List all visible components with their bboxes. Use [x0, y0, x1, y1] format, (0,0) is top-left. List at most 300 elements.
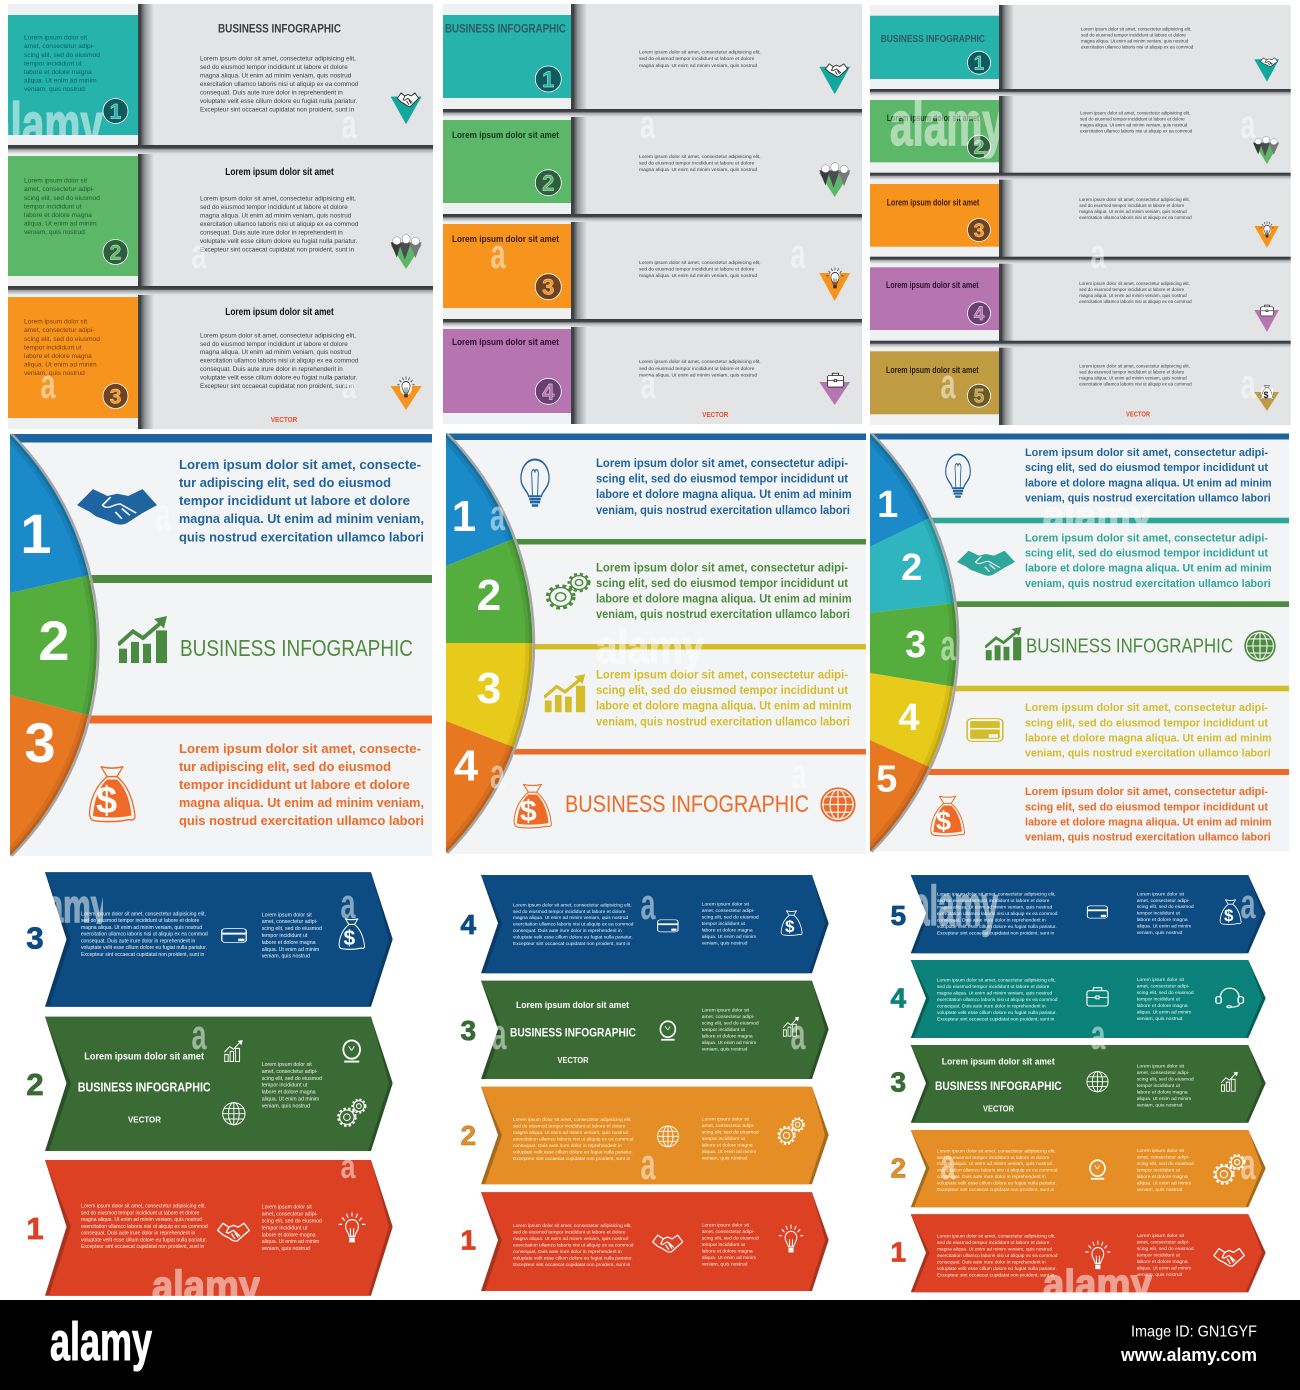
arrow 1 left text: Lorem ipsum dolor sit amet, consectetur adipisicing elit, [513, 1223, 632, 1229]
arrow 4 left text: exercitation ullamco laboris nisi ut aliquip ex ea commod [513, 922, 634, 928]
arrow 1 right text: amet, consectetur adipi- [702, 1229, 755, 1235]
arrow 1 left text: voluptate velit esse cillum dolore eu fugiat nulla pariatur. [513, 1255, 633, 1261]
arrow 4 right text: veniam, quis nostrud [702, 940, 748, 946]
arrow 1 right text: aliqua. Ut enim ad minim [262, 1239, 320, 1245]
arrow 4 left text: Lorem ipsum dolor sit amet, consectetur adipisicing elit, [937, 978, 1056, 984]
body text 1: sed do eiusmod tempor incididunt ut labore et dolore [639, 56, 755, 62]
watermarks: a [640, 1140, 656, 1189]
text block green [596, 562, 852, 621]
text block orange: Lorem ipsum dolor sit amet, consectetur adipi- [1025, 786, 1268, 798]
arrow 1 left text: consequat. Duis aute irure dolor in reprehenderit in [513, 1249, 622, 1255]
arrow 1 right text: Lorem ipsum dolor sit [702, 1222, 750, 1228]
number 3: 3 [891, 1067, 906, 1098]
arrow 3 blue [45, 872, 393, 1007]
text block orange: Lorem ipsum dolor sit amet, consecte- [179, 742, 421, 756]
band 2 text: aliqua. Ut enim ad minim [24, 221, 97, 228]
icon: bulb on orange triangle [1254, 221, 1279, 248]
arrow 5 left text: Excepteur sint occaecat cupidatat non proident, sunt in [937, 931, 1055, 937]
arrow 3 green [481, 981, 829, 1079]
arrow 2 right text: Lorem ipsum dolor sit [702, 1116, 750, 1122]
arrow 1 right text: veniam, quis nostrud [702, 1261, 748, 1267]
arrow 3 right text: Lorem ipsum dolor sit [702, 1007, 750, 1013]
arrow 1 left text: consequat. Duis aute irure dolor in reprehenderit in [937, 1260, 1046, 1266]
text block green: veniam, quis nostrud exercitation ullamco labori [596, 609, 850, 621]
watermarks: a [490, 750, 505, 797]
arrow 3 right text: labore et dolore magna [262, 940, 316, 946]
icon: handshake on teal triangle [391, 93, 422, 124]
panel: 5-step semicircle [870, 434, 1289, 852]
number 2: 2 [901, 547, 922, 589]
icon: globe [658, 1126, 678, 1147]
arrow 1 right text: tempor incididunt ut [702, 1242, 746, 1248]
heading: BUSINESS INFOGRAPHIC [565, 791, 809, 818]
text block blue: veniam, quis nostrud exercitation ullamco labori [596, 505, 850, 517]
arrow 5 left text: sed do eiusmod tempor incididunt ut labore et dolore [937, 898, 1050, 904]
top rule [870, 434, 1289, 440]
text block teal: labore et dolore magna aliqua. Ut enim ad minim [1025, 563, 1272, 575]
arrow 1 right text: amet, consectetur adipi- [1137, 1239, 1190, 1245]
arrow 4 right text: tempor incididunt ut [702, 921, 746, 927]
icon: headset [1216, 988, 1243, 1008]
text block yellow: veniam, quis nostrud exercitation ullamco labori [596, 716, 850, 728]
body text 2: consequat. Duis aute irure dolor in reprehenderit in [200, 229, 343, 236]
arrow 5 right text: labore et dolore magna [1137, 917, 1188, 923]
icon: money bag [1220, 900, 1241, 925]
watermarks: a [490, 491, 505, 540]
body text 2: sed do eiusmod tempor incididunt ut labore et dolore [1080, 116, 1185, 121]
watermarks: a [492, 1010, 507, 1059]
icon: chart [1221, 1072, 1238, 1091]
semicircle segments [10, 434, 97, 856]
arrow 1 right text: amet, consectetur adipi- [262, 1212, 318, 1218]
arrow 1 right text: veniam, quis nostrud [1137, 1272, 1183, 1278]
band 1 text: tempor incididunt ut [24, 60, 82, 67]
number 2: 2 [26, 1067, 44, 1102]
body text 3: magna aliqua. Ut enim ad minim veniam, quis nostrud [200, 349, 352, 356]
arrow 3 left text: sed do eiusmod tempor incididunt ut labore et dolore [81, 918, 199, 924]
watermarks: a [40, 360, 56, 407]
body text 3: Excepteur sint occaecat cupidatat non proident, sunt in [200, 383, 355, 390]
heading 4: Lorem ipsum dolor sit amet [886, 280, 979, 290]
top rule [10, 434, 432, 442]
watermarks: a [1090, 230, 1106, 277]
number badge 1: 1 [110, 100, 122, 124]
text block yellow: veniam, quis nostrud exercitation ullamco labori [1025, 747, 1271, 759]
body text 1: exercitation ullamco laboris nisi ut aliquip ex ea commod [1081, 45, 1194, 50]
arrow 3 left text: voluptate velit esse cillum dolore eu fugiat nulla pariatur. [81, 945, 207, 951]
text block yellow: Lorem ipsum dolor sit amet, consectetur adipi- [596, 670, 848, 682]
arrow 2 right text: amet, consectetur adipi- [262, 1069, 318, 1075]
text block green: labore et dolore magna aliqua. Ut enim ad minim [596, 593, 852, 605]
arrow 1 left text: magna aliqua. Ut enim ad minim veniam, quis nostrud [81, 1217, 202, 1223]
panel: 3-step semicircle [10, 434, 432, 856]
number badge 5 [968, 384, 990, 408]
icon: growth chart [118, 616, 167, 663]
arrow 4 right text: Lorem ipsum dolor sit [1137, 977, 1185, 983]
vector label: VECTOR [271, 415, 298, 424]
arrow 2 left text: sed do eiusmod tempor incididunt ut labore et dolore [937, 1155, 1050, 1161]
band 1 text: Lorem ipsum dolor sit [24, 35, 87, 42]
icon: money bag on tan triangle [1254, 385, 1279, 411]
arrow 3 right text: tempor incididunt ut [1137, 1083, 1181, 1089]
band 3 text: scing elit, sed do eiusmod [24, 336, 100, 343]
arrow 3 left text: Lorem ipsum dolor sit amet, consectetur adipisicing elit, [81, 911, 206, 917]
arrow 1 right text: scing elit, sed do eiusmod [1137, 1246, 1194, 1252]
arrow 1 left text: exercitation ullamco laboris nisi ut aliquip ex ea commod [937, 1253, 1058, 1259]
arrow 2 vector: VECTOR [128, 1114, 161, 1124]
arrow 2 right text: labore et dolore magna [702, 1142, 753, 1148]
body text 2: exercitation ullamco laboris nisi ut aliquip ex ea commod [200, 221, 359, 228]
icon: globe [1244, 630, 1276, 662]
icon: money bag: $ [1224, 906, 1234, 925]
number 3: 3 [905, 624, 926, 666]
text block green: scing elit, sed do eiusmod tempor incididunt ut [596, 578, 848, 590]
body text 4: magna aliqua. Ut enim ad minim veniam, quis nostrud [1079, 293, 1187, 298]
icon: credit card [967, 719, 1003, 741]
rule 4 [514, 749, 866, 754]
arrow 1 right text: labore et dolore magna [702, 1248, 753, 1254]
arrow 1 right text: tempor incididunt ut [262, 1225, 308, 1231]
arrow 4 left text: Lorem ipsum dolor sit amet, consectetur adipisicing elit, [513, 902, 632, 908]
arrow 1 red [45, 1160, 393, 1296]
band 2 [443, 120, 571, 203]
heading 4: Lorem ipsum dolor sit amet [452, 337, 560, 348]
arrow 3 right text: amet, consectetur adipi- [262, 919, 318, 925]
arrow 2 right text: aliqua. Ut enim ad minim [1137, 1180, 1191, 1186]
band 4 [870, 267, 999, 330]
arrow 1 left text: voluptate velit esse cillum dolore eu fugiat nulla pariatur. [81, 1237, 207, 1243]
arrow 1 red [911, 1214, 1266, 1292]
arrow 2 left text: Lorem ipsum dolor sit amet, consectetur adipisicing elit, [513, 1117, 632, 1123]
arrow 3 right text: labore et dolore magna [1137, 1090, 1188, 1096]
watermarks: a [790, 1010, 806, 1059]
icon: globe [223, 1103, 245, 1125]
rule 5 [928, 769, 1289, 775]
arrow 2 right text: veniam, quis nostrud [262, 1103, 310, 1109]
heading 2: Lorem ipsum dolor sit amet [225, 167, 334, 178]
number 1: 1 [877, 484, 898, 526]
number 2: 2 [477, 571, 501, 620]
arrow 3 heading: Lorem ipsum dolor sit amet [942, 1056, 1055, 1068]
arrow 3 vector: VECTOR [983, 1104, 1014, 1113]
text block yellow: scing elit, sed do eiusmod tempor incididunt ut [596, 685, 848, 697]
text block orange: veniam, quis nostrud exercitation ullamco labori [1025, 831, 1271, 843]
arrow 2 left text: consequat. Duis aute irure dolor in reprehenderit in [937, 1174, 1046, 1180]
number 4: 4 [461, 909, 477, 940]
top rule [446, 434, 866, 440]
body text 2: Excepteur sint occaecat cupidatat non proident, sunt in [200, 246, 355, 253]
arrow 1 left text: exercitation ullamco laboris nisi ut aliquip ex ea commod [513, 1242, 634, 1248]
number badge 3 [968, 218, 990, 242]
panel: 3-step arrows [26, 872, 393, 1296]
body text 3: Lorem ipsum dolor sit amet, consectetur adipisicing elit, [639, 260, 761, 266]
footer bar [0, 1300, 1300, 1390]
text block orange: magna aliqua. Ut enim ad minim veniam, [179, 796, 424, 810]
number 4: 4 [891, 983, 907, 1014]
panel: 4-step tabs [443, 4, 862, 424]
text block blue: Lorem ipsum dolor sit amet, consecte- [179, 458, 421, 472]
arrow 1 left text: magna aliqua. Ut enim ad minim veniam, quis nostrud [513, 1236, 628, 1242]
arrow 5 left text: magna aliqua. Ut enim ad minim veniam, quis nostrud [937, 905, 1052, 911]
arrow 3 left text: Excepteur sint occaecat cupidatat non proident, sunt in [81, 952, 205, 958]
arrow 4 left text: Excepteur sint occaecat cupidatat non proident, sunt in [937, 1017, 1055, 1023]
text block teal: scing elit, sed do eiusmod tempor incididunt ut [1025, 548, 1268, 560]
icon: money bag: $ [936, 806, 951, 836]
arrow 3 right text: aliqua. Ut enim ad minim [1137, 1096, 1191, 1102]
arrow 3 vector: VECTOR [558, 1056, 589, 1065]
arrow 5 left text: Lorem ipsum dolor sit amet, consectetur adipisicing elit, [937, 892, 1056, 898]
text block blue [596, 458, 852, 517]
number 3: 3 [26, 920, 44, 955]
title: BUSINESS INFOGRAPHIC [881, 33, 985, 45]
arrow 2 left text: Excepteur sint occaecat cupidatat non proident, sunt in [513, 1156, 631, 1162]
arrow 4 right text: amet, consectetur adipi- [702, 908, 755, 914]
band 1 text: labore et dolore magna [24, 69, 92, 76]
text block blue: veniam, quis nostrud exercitation ullamco labori [1025, 493, 1271, 505]
band 2 text: Lorem ipsum dolor sit [24, 178, 87, 185]
arrow 1 left text: exercitation ullamco laboris nisi ut aliquip ex ea commod [81, 1224, 208, 1230]
band 1 [870, 16, 999, 79]
arrow 2 right text: labore et dolore magna [1137, 1174, 1188, 1180]
number 1: 1 [461, 1224, 476, 1255]
body text 3: sed do eiusmod tempor incididunt ut labore et dolore [200, 341, 348, 348]
watermarks: a [940, 360, 956, 407]
number 1: 1 [26, 1211, 44, 1246]
arrow 4 left text: magna aliqua. Ut enim ad minim veniam, quis nostrud [513, 915, 628, 921]
arrow 2 right text: veniam, quis nostrud [1137, 1187, 1183, 1193]
number badge 4: 4 [542, 379, 555, 404]
body text 1: exercitation ullamco laboris nisi ut aliquip ex ea commod [200, 81, 359, 88]
arrow 3 right text: Lorem ipsum dolor sit [1137, 1064, 1185, 1070]
band 3 [443, 224, 571, 308]
band 2 [870, 100, 999, 162]
arrow 1 left text: voluptate velit esse cillum dolore eu fugiat nulla pariatur. [937, 1266, 1057, 1272]
number badge 2: 2 [542, 171, 554, 196]
body text 3: voluptate velit esse cillum dolore eu fugiat nulla pariatur. [200, 375, 358, 382]
arrow 3 heading: Lorem ipsum dolor sit amet [516, 1000, 630, 1011]
band 1 [8, 15, 138, 135]
rule 3 [955, 601, 1289, 607]
watermarks: a [1240, 103, 1256, 147]
watermarks: a [192, 1011, 207, 1058]
watermarks: a [640, 360, 656, 407]
arrow 5 right text: amet, consectetur adipi- [1137, 898, 1190, 904]
text block teal: veniam, quis nostrud exercitation ullamco labori [1025, 578, 1271, 590]
icon: money bag [781, 911, 802, 936]
number badge 2 [968, 135, 990, 158]
band 3 text: veniam, quis nostrud [24, 370, 85, 377]
text block yellow: Lorem ipsum dolor sit amet, consectetur adipi- [1025, 702, 1268, 714]
arrow 1 left text: sed do eiusmod tempor incididunt ut labore et dolore [937, 1240, 1050, 1246]
text block orange: scing elit, sed do eiusmod tempor incididunt ut [1025, 801, 1268, 813]
icon: clock [660, 1021, 675, 1040]
arrow 1 right text: aliqua. Ut enim ad minim [1137, 1265, 1191, 1271]
body text 4: sed do eiusmod tempor incididunt ut labore et dolore [1079, 287, 1185, 292]
arrow 2 left text: exercitation ullamco laboris nisi ut aliquip ex ea commod [513, 1136, 634, 1142]
icon: clock [343, 1040, 360, 1062]
arrow 3 right text: scing elit, sed do eiusmod [702, 1020, 759, 1026]
arrow 3 right text: veniam, quis nostrud [1137, 1103, 1183, 1109]
number badge 3: 3 [110, 386, 121, 408]
watermarks: a [490, 230, 506, 277]
icon: bulb on orange triangle [391, 376, 422, 410]
arrow 1 right text: labore et dolore magna [1137, 1259, 1188, 1265]
number badge 1 [103, 98, 128, 124]
text block orange: quis nostrud exercitation ullamco labori [179, 814, 424, 828]
arrow 1 right text: aliqua. Ut enim ad minim [702, 1255, 756, 1261]
body text 4: exercitation ullamco laboris nisi ut aliquip ex ea commod [1079, 299, 1192, 304]
arrow 4 right text: tempor incididunt ut [1137, 996, 1181, 1002]
icon: bulb with rays [779, 1225, 803, 1252]
arrow 4 left text: consequat. Duis aute irure dolor in reprehenderit in [513, 928, 622, 934]
icon: globe [1087, 1072, 1108, 1092]
arrow 2 right text: scing elit, sed do eiusmod [702, 1129, 759, 1135]
heading 2: Lorem ipsum dolor sit amet [452, 130, 560, 141]
text block orange [1025, 786, 1272, 843]
text block teal [1025, 532, 1272, 590]
arrow 4 right text: labore et dolore magna [1137, 1003, 1188, 1009]
arrow 1 left text: Lorem ipsum dolor sit amet, consectetur adipisicing elit, [81, 1204, 206, 1210]
icon: credit card [222, 929, 246, 942]
watermarks: a [1240, 1140, 1256, 1189]
icon: gears [779, 1118, 804, 1144]
arrow 1 right text: Lorem ipsum dolor sit [262, 1205, 312, 1211]
arrow 2 orange [911, 1130, 1266, 1207]
arrow 4 left text: magna aliqua. Ut enim ad minim veniam, quis nostrud [937, 991, 1052, 997]
arrow 3 right text: labore et dolore magna [702, 1033, 753, 1039]
text block blue [1025, 447, 1272, 505]
arrow 2 green [45, 1017, 393, 1151]
arrow 2 left text: sed do eiusmod tempor incididunt ut labore et dolore [513, 1123, 626, 1129]
band 1 [443, 15, 571, 98]
arrow 1 left text: sed do eiusmod tempor incididunt ut labore et dolore [81, 1210, 199, 1216]
icon: credit card [1087, 906, 1107, 918]
icon: mountains on green triangle [391, 235, 422, 269]
body text 5: exercitation ullamco laboris nisi ut aliquip ex ea commod [1079, 381, 1192, 386]
arrow 3 right text: scing elit, sed do eiusmod [1137, 1077, 1194, 1083]
icon: briefcase on purple triangle [819, 373, 850, 405]
icon: mountains on green triangle [819, 163, 850, 197]
arrow 4 left text: consequat. Duis aute irure dolor in reprehenderit in [937, 1004, 1046, 1010]
icon: money bag [89, 767, 135, 822]
arrow 2 left text: consequat. Duis aute irure dolor in reprehenderit in [513, 1143, 622, 1149]
body text 1: Lorem ipsum dolor sit amet, consectetur adipisicing elit, [1081, 27, 1192, 32]
number badge 1: 1 [974, 54, 985, 74]
body text 4: Lorem ipsum dolor sit amet, consectetur adipisicing elit, [639, 359, 761, 365]
arrow 4 right text: veniam, quis nostrud [1137, 1016, 1183, 1022]
number badge 3 [535, 274, 561, 300]
body text 2: sed do eiusmod tempor incididunt ut labore et dolore [639, 160, 755, 166]
body text 1: magna aliqua. Ut enim ad minim veniam, quis nostrud [639, 63, 757, 69]
arrow 1 right text: veniam, quis nostrud [262, 1246, 310, 1252]
icon: light bulb [521, 459, 549, 506]
text block blue: magna aliqua. Ut enim ad minim veniam, [179, 512, 424, 526]
arrow 5 right text: aliqua. Ut enim ad minim [1137, 924, 1191, 930]
rule 2 [930, 518, 1289, 523]
number badge 2 [535, 170, 561, 196]
arrow 3 right text: scing elit, sed do eiusmod [262, 926, 322, 932]
title: BUSINESS INFOGRAPHIC [218, 24, 341, 36]
icon: credit card [658, 920, 678, 932]
arrow 2 right text: aliqua. Ut enim ad minim [702, 1149, 756, 1155]
text block blue: tur adipiscing elit, sed do eiusmod [179, 476, 391, 490]
number 1: 1 [891, 1237, 906, 1268]
arrow 5 left text: consequat. Duis aute irure dolor in reprehenderit in [937, 918, 1046, 924]
icon: bulb on orange triangle [819, 267, 850, 301]
icon: handshake [653, 1235, 683, 1252]
watermarks: alamy [596, 621, 704, 673]
body text 1: sed do eiusmod tempor incididunt ut labore et dolore [200, 64, 348, 71]
body text 3: sed do eiusmod tempor incididunt ut labore et dolore [639, 266, 755, 272]
arrow 1 right text: scing elit, sed do eiusmod [702, 1235, 759, 1241]
body text 3: Lorem ipsum dolor sit amet, consectetur adipisicing elit, [1079, 197, 1190, 202]
number badge 5: 5 [974, 386, 985, 408]
number 1: 1 [452, 492, 476, 541]
body text 4: magna aliqua. Ut enim ad minim veniam, quis nostrud [639, 372, 757, 378]
panel: 5-step tabs [870, 5, 1291, 425]
text block orange: labore et dolore magna aliqua. Ut enim ad minim [1025, 816, 1272, 828]
rule 4 [955, 686, 1289, 691]
number 3: 3 [477, 664, 501, 713]
watermarks: a [342, 103, 357, 147]
band 2 text: amet, consectetur adipi- [24, 186, 94, 193]
heading: BUSINESS INFOGRAPHIC [1026, 634, 1233, 658]
body text 2: magna aliqua. Ut enim ad minim veniam, quis nostrud [200, 212, 352, 220]
body text 2: exercitation ullamco laboris nisi ut aliquip ex ea commod [1080, 128, 1193, 133]
arrow 4 right text: amet, consectetur adipi- [1137, 983, 1190, 989]
band 2 [8, 156, 138, 276]
arrow 3 left text: magna aliqua. Ut enim ad minim veniam, quis nostrud [81, 925, 202, 931]
icon: handshake [957, 551, 1015, 576]
watermarks: a [792, 750, 807, 797]
arrow 4 left text: voluptate velit esse cillum dolore eu fugiat nulla pariatur. [937, 1010, 1057, 1016]
icon: bulb with rays [1086, 1241, 1110, 1269]
number badge 2: 2 [110, 242, 121, 264]
arrow 1 left text: Excepteur sint occaecat cupidatat non proident, sunt in [513, 1262, 631, 1268]
arrow 5 right text: Lorem ipsum dolor sit [1137, 891, 1185, 897]
vector label: VECTOR [1126, 412, 1150, 418]
panel: 5-step arrows [891, 875, 1266, 1292]
arrow 4 right text: aliqua. Ut enim ad minim [1137, 1009, 1191, 1015]
arrow 3 left text: consequat. Duis aute irure dolor in reprehenderit in [81, 938, 196, 944]
text block blue: labore et dolore magna aliqua. Ut enim ad minim [596, 489, 852, 501]
body text 4: sed do eiusmod tempor incididunt ut labore et dolore [639, 366, 755, 372]
number 4: 4 [898, 697, 920, 739]
arrow 4 right text: labore et dolore magna [702, 927, 753, 933]
text block yellow [596, 670, 852, 728]
number 5: 5 [876, 759, 897, 801]
arrow 4 right text: Lorem ipsum dolor sit [702, 901, 750, 907]
arrow 3 right text: tempor incididunt ut [702, 1027, 746, 1033]
number badge 3: 3 [542, 275, 554, 300]
body text 5: sed do eiusmod tempor incididunt ut labore et dolore [1079, 369, 1185, 374]
icon: growth chart [985, 627, 1021, 660]
panel: 4-step arrows [461, 875, 829, 1291]
arrow 5 right text: scing elit, sed do eiusmod [1137, 904, 1194, 910]
arrow 4 left text: Excepteur sint occaecat cupidatat non proident, sunt in [513, 941, 631, 947]
text block orange: tur adipiscing elit, sed do eiusmod [179, 760, 391, 774]
arrow 2 right text: amet, consectetur adipi- [1137, 1154, 1190, 1160]
body text 1: sed do eiusmod tempor incididunt ut labore et dolore [1081, 33, 1186, 38]
body text 1: magna aliqua. Ut enim ad minim veniam, quis nostrud [200, 72, 352, 80]
arrow 3 title: BUSINESS INFOGRAPHIC [935, 1079, 1062, 1093]
icon: money bag: $ [520, 795, 537, 828]
number 4: 4 [454, 742, 479, 791]
heading 3: Lorem ipsum dolor sit amet [452, 234, 560, 245]
icon: money bag: $ [344, 927, 356, 950]
arrow 5 right text: tempor incididunt ut [1137, 911, 1181, 917]
text block blue [179, 458, 424, 544]
